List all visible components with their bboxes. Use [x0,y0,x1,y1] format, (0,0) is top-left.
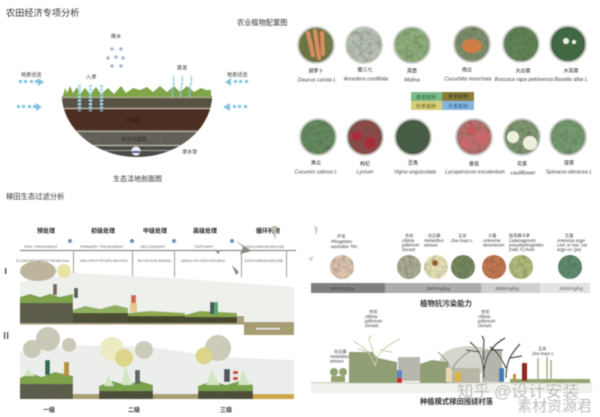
basella [550,26,586,62]
green shrub masses [349,352,397,383]
plant names: 大白菜 [515,68,531,74]
cabbage [503,26,539,62]
plant details [308,31,576,150]
plant labels: Zea mays L [450,238,474,243]
section labels: Durazz. [478,323,492,328]
section labels: Durazz. [365,323,379,328]
runoff arrows left [17,78,44,111]
plant labels: Durazz. [402,247,416,252]
plant labels: Artemisia [482,238,501,243]
label I [5,268,6,274]
treatment stages header: SECONDARY [140,244,166,249]
diagram labels [21,33,247,156]
pumpkin [454,26,490,62]
latin names: Vigna unguiculata [394,170,436,176]
latin names: Cucumis sativus L [295,170,338,176]
diagram labels: 入渗 [86,74,96,80]
chart title: 植物抗污染能力 [420,299,472,308]
plant names: 菠菜 [564,160,574,166]
season legend [411,92,474,110]
pollution tolerance chart: 1800mg/kg [559,286,583,292]
season legend: 夏季栽种 [448,93,468,100]
season legend: 冬季栽种 [448,103,468,110]
plant circles [295,26,592,176]
diagram labels: 地表径流 [227,72,247,78]
title: farmland analysis: 农田经济专项分析 [6,7,80,18]
water box [244,322,294,335]
pollution tolerance chart [311,232,590,308]
watermark [457,382,592,415]
treatment stages header: PRIMARY TREATMENT [80,244,124,249]
treatment stages header: 初级处理 [91,227,115,235]
figures I [53,284,57,295]
latin names: Basella alba L [554,77,588,83]
level labels: 三级 [220,406,232,414]
treatment stages header: ROTATION BASIN [137,258,171,263]
plant labels: Artemisia argyi [556,238,586,243]
plant circles [330,255,582,279]
plant labels: pseudophragmites [508,242,544,248]
figures II [45,360,50,375]
section labels: annuus [330,358,345,364]
watermark: @设计安装 [494,382,579,401]
treatment stages header: PRE-TREATMENT [24,244,58,249]
treatment stages header: HELOPHYTES/PLANTING [80,258,128,263]
section labels: 合欢 [369,308,378,315]
tomato [456,119,492,155]
pale foliage behind trees [440,346,500,374]
plant names: 胡萝卜 [308,68,324,74]
ground band [311,383,592,393]
plant names: 木耳菜 [563,68,579,74]
small shrubs [330,368,338,376]
latin names: Brassica rapa pekinensis [495,77,554,83]
plant names: 黄瓜 [311,160,321,166]
treatment stages header: SAND FILTRATION BED [181,258,225,263]
section labels: julibrissin [364,318,383,324]
watermark: 知乎 [457,382,490,401]
rain drops [106,47,125,68]
section title: 种植模式梯田围绕村落 [420,397,494,406]
treatment stages header [16,225,318,277]
grass strip [63,86,211,97]
plant labels: 假苇拂子茅 [509,232,530,239]
plant labels: Calamagrostis [509,238,537,243]
diagram labels: 蒸发 [177,64,187,72]
watermark: 素材资源君 [517,398,592,415]
latin names: Anredera cordifolia [343,76,388,82]
cowpea [395,119,431,155]
value bar [311,283,385,293]
panel II background [20,345,294,395]
plant labels: 玉米 [458,232,467,239]
small blue arrows [68,239,234,243]
diagram labels: 地表径流 [21,72,41,78]
treatment stages header: DISCHARGE/REUSE [246,244,285,249]
circle rings [298,26,586,155]
season legend: 秋季栽种 [416,103,436,110]
pollution tolerance chart: 6300mg/kg [330,286,354,292]
plant names [308,66,579,168]
section I [5,261,294,335]
evaporation lines [172,76,191,97]
diagram labels: 降水 [111,33,121,40]
treatment stages header: 高级处理 [193,227,217,235]
section labels: 合欢 [481,308,490,315]
plant names: 藤三七 [357,66,373,74]
diagram labels: 土壤层 [125,117,140,124]
plant names: 枸杞 [360,160,370,168]
cauliflower [504,119,540,155]
heading: terrace ecology: 梯田生态过滤分析 [6,192,64,201]
soil bowl [60,96,215,159]
planting section [311,308,592,406]
trees I [20,261,56,281]
plant labels: annuus [424,242,439,248]
pollution tolerance chart: 2800mg/kg [495,286,519,292]
panel I background [20,273,294,322]
plant labels: Albizia [401,238,415,243]
plant labels: 艾蒿 [565,232,573,239]
plant labels [331,232,588,252]
plant names: 番茄 [469,160,479,168]
latin names: cauliflower [510,170,536,176]
level labels: 二级 [128,406,140,414]
plant names: 花菜 [517,160,527,168]
terraces [20,378,253,399]
terrain I [20,297,237,324]
pale tree [353,336,400,366]
plant names: 南瓜 [462,66,472,74]
level labels: 一级 [43,406,55,414]
runoff arrows right [223,78,248,111]
soil section diagram [17,33,248,183]
treatment stages header: TERTIARY [194,244,214,249]
plant names: 莴苣 [407,68,417,74]
treatment stages header: 中级处理 [143,227,167,235]
pollution tolerance chart: 3800mg/kg [426,286,450,292]
molina [394,27,430,63]
section II [4,327,294,414]
ground strip [73,394,99,399]
infiltration arrows [80,85,102,111]
plant labels: (Hall. F.) Keel. [509,247,535,252]
plant labels: 芦苇 [337,233,345,240]
anredera [346,27,382,63]
cucumber [300,119,336,155]
plant names: 豆角 [408,160,418,166]
latin names: Daucus carota L [298,78,336,84]
plant labels: 合欢 [405,232,414,239]
latin names: Lycopersicon esculentum [445,170,505,176]
section labels: Albizia [477,314,491,319]
latin names: Cucurbita moschata [444,76,492,82]
corn [538,357,551,380]
plant labels: Levl. et Van. var. [557,242,588,248]
people [397,370,402,378]
pipe [132,146,140,156]
plant labels: julibrissin [401,242,420,248]
plant labels: argyi cv. Qiai [557,247,582,252]
section labels: 向日葵 [334,348,347,355]
diagram caption: 生态洼地剖面图 [113,174,162,183]
plant labels: Helianthus [424,238,445,243]
dark trees [466,336,522,378]
plant labels: Phragmites [331,239,353,244]
section labels: 玉米 [538,345,547,352]
label II [4,332,8,339]
diagram labels: 水分过滤层 [121,136,146,143]
treatment stages header: 预处理 [37,227,55,235]
latin names: Molina [404,78,420,84]
spinach [550,119,586,155]
plant labels: australias Trin. [331,244,358,249]
latin names: Lycium [357,170,374,176]
section labels: Albizia [364,314,378,319]
latin names: Spinacia oleracea L [546,170,592,176]
plant labels: 向日葵 [428,232,441,239]
plant labels: 沙蒿 [488,232,496,239]
lycium [347,119,383,155]
section labels: Zea mays L [531,351,555,356]
treatment stages header: 循环利用 [256,227,280,235]
latin names [295,76,592,176]
diagram labels: 渗水管 [182,148,197,156]
reed tufts [24,365,250,386]
treatment stages header: FLUID/SEDIMENT REMOVAL [16,258,71,263]
section labels [330,308,555,364]
level labels [43,406,232,414]
plant labels: desertorum [483,242,505,248]
heading: crop planting: 农业植物配置图 [237,18,287,27]
birds [214,225,318,275]
season legend: 春季栽种 [416,94,436,101]
carrot [298,27,334,63]
section labels: julibrissin [477,318,496,324]
treatment stages header: DISCHARGE/REUSE [245,258,284,263]
section labels: Helianthus [330,354,351,359]
tree clouds [23,327,231,367]
